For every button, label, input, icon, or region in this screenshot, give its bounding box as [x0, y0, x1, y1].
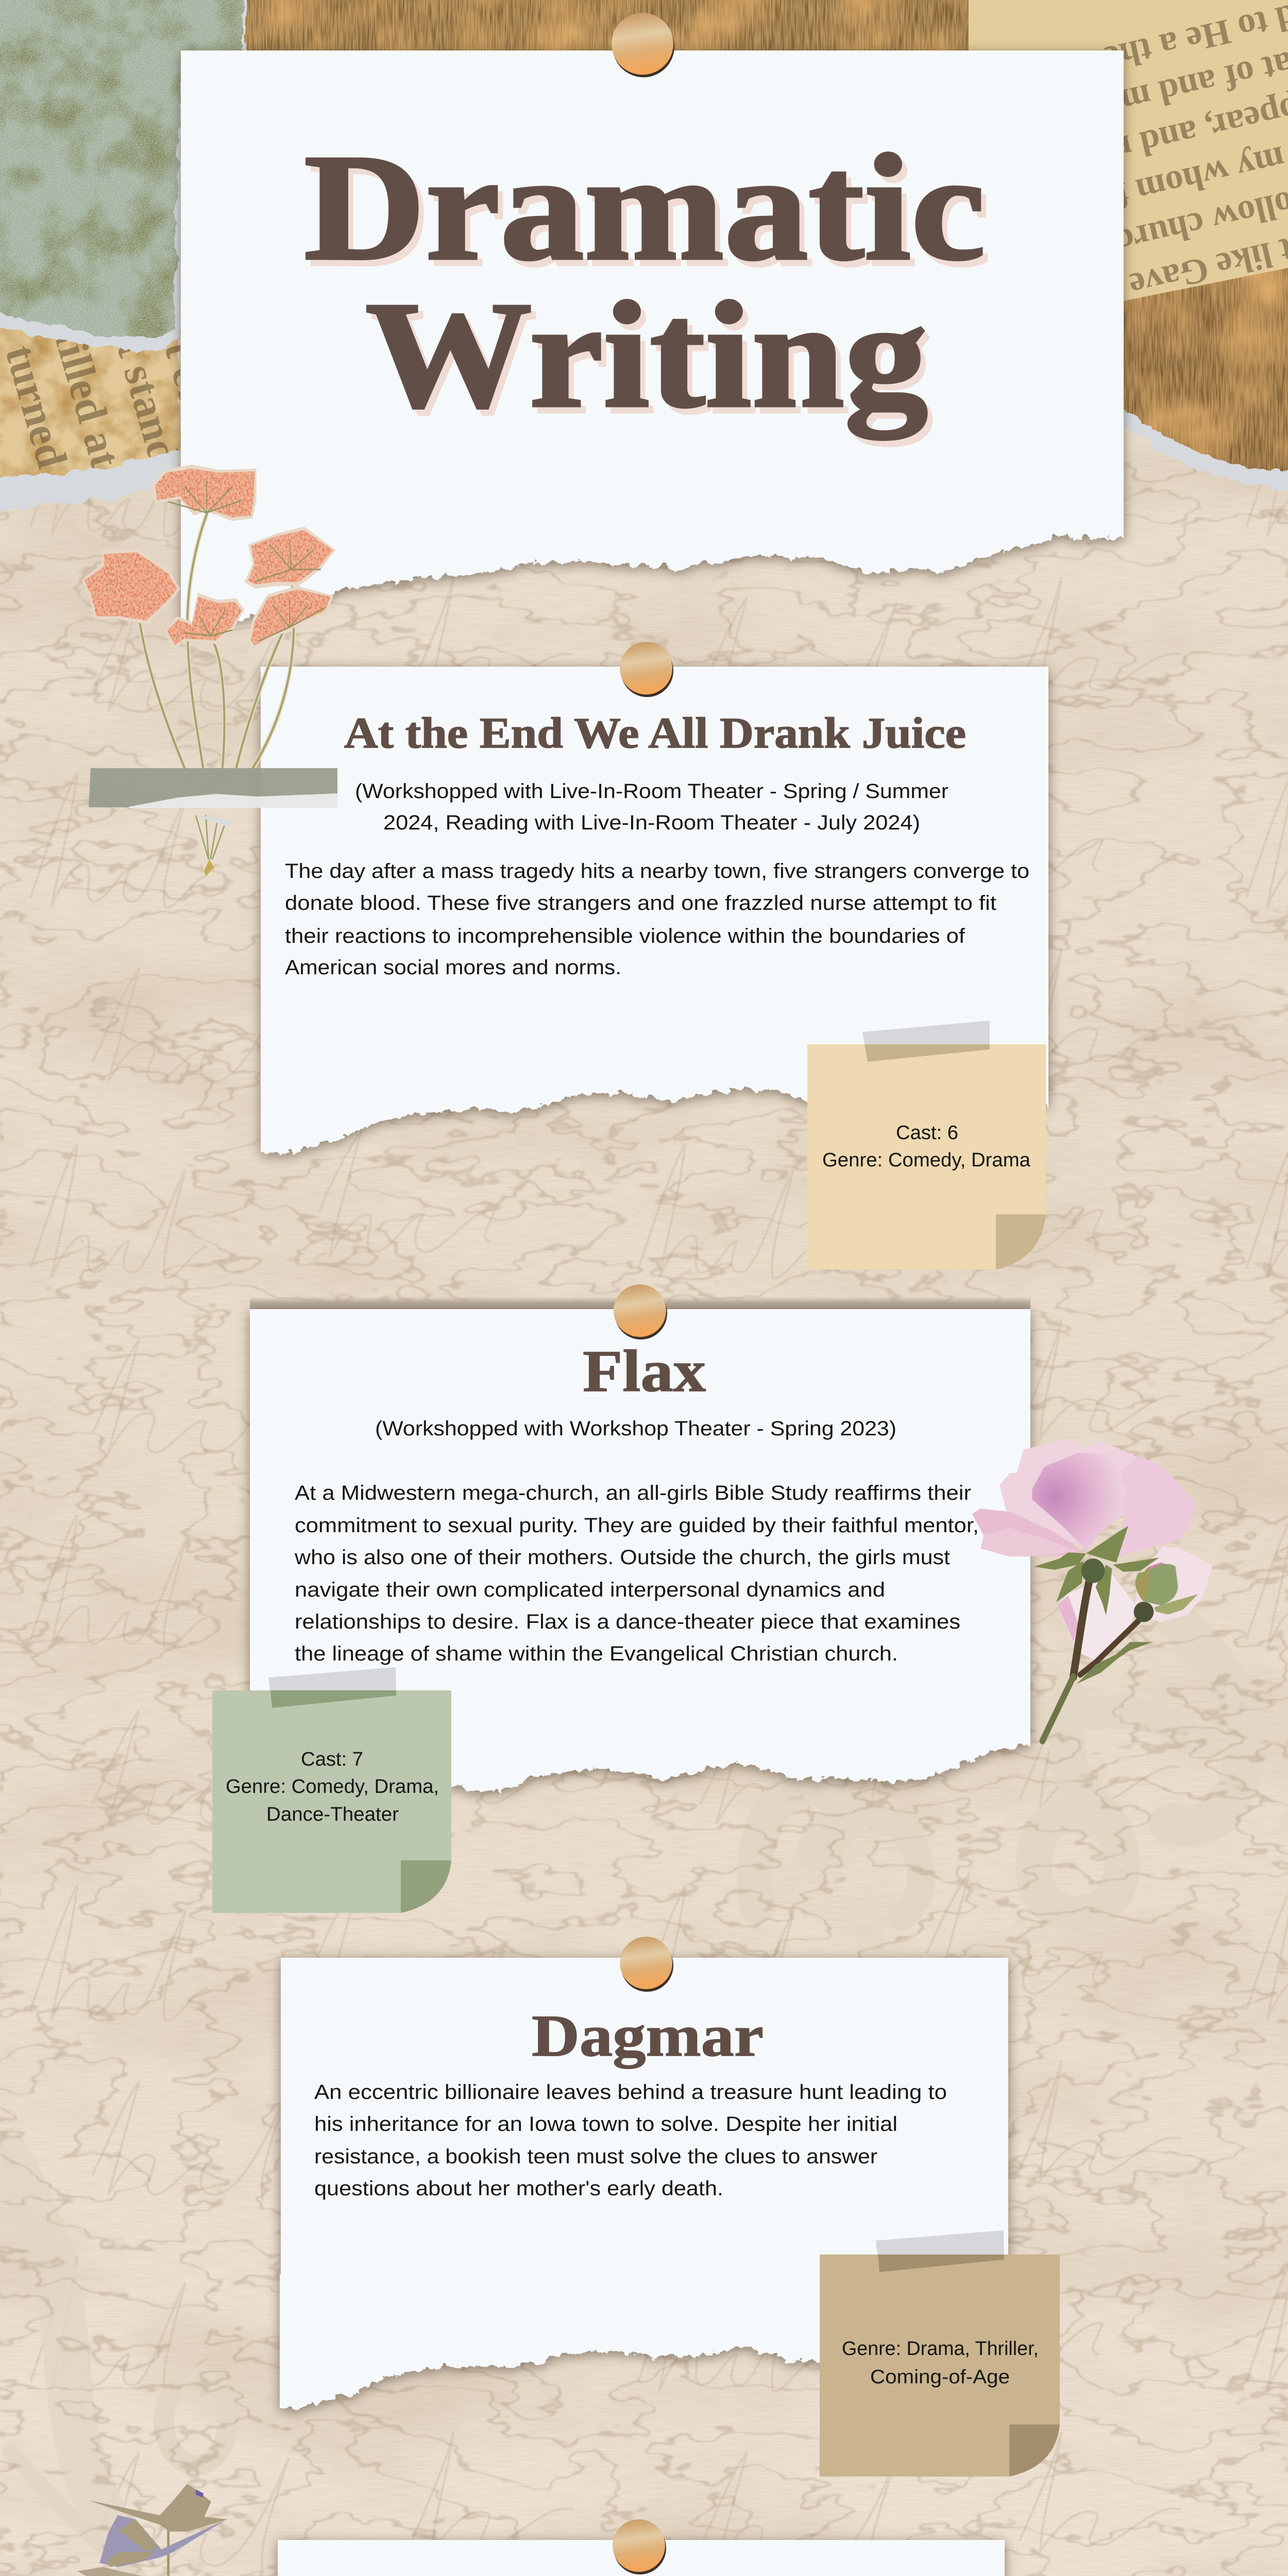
pin	[612, 13, 674, 77]
title: Dramatic	[309, 129, 991, 298]
back petals	[999, 1438, 1147, 1546]
torn newspaper left: filled at	[45, 325, 129, 473]
tape	[862, 1021, 990, 1062]
production history: (Workshopped with Workshop Theater - Spring 2023)	[375, 1417, 896, 1440]
torn paper sheet	[270, 1958, 1020, 2408]
stems	[1042, 1583, 1139, 1741]
torn paper sheet	[268, 2540, 1015, 2576]
synopsis: At a Midwestern mega-church, an all-girls Bible Study reaffirms their	[295, 1482, 971, 1504]
torn green paper top left	[0, 0, 242, 348]
pin	[613, 2519, 666, 2574]
note text: Genre: Drama, Thriller,	[842, 2338, 1039, 2360]
note text: Genre: Comedy, Drama,	[226, 1776, 439, 1798]
torn paper sheet	[247, 667, 1056, 1157]
production history	[355, 780, 948, 834]
panel: Flax	[242, 1284, 1038, 1803]
bloom E	[248, 586, 334, 650]
panel: title sheet	[170, 13, 1133, 626]
torn newspaper left: st et	[150, 319, 217, 405]
bud hip	[1134, 1602, 1154, 1622]
panel: Backwash	[230, 2519, 1015, 2576]
washi tape over stems	[89, 768, 337, 827]
pin	[620, 642, 673, 697]
left petals	[972, 1509, 1083, 1556]
tape over note	[270, 1690, 396, 1708]
synopsis: American social mores and norms.	[285, 956, 621, 979]
sticky note: cast 7	[212, 1667, 451, 1913]
torn paper sheet	[242, 1309, 1038, 1803]
lower petals	[1133, 1546, 1212, 1622]
synopsis: the lineage of shame within the Evangelical Christian church.	[295, 1642, 898, 1665]
title	[304, 123, 991, 448]
synopsis: questions about her mother's early death.	[314, 2177, 723, 2200]
central petal	[1032, 1453, 1126, 1551]
synopsis: An eccentric billionaire leaves behind a treasure hunt leading to	[314, 2081, 947, 2104]
calyx sepals	[1034, 1526, 1159, 1616]
tape	[876, 2230, 1004, 2272]
tape over note	[878, 2255, 1004, 2272]
heading: Dagmar	[532, 2003, 764, 2069]
title: Dramatic	[304, 123, 986, 292]
synopsis	[314, 2081, 947, 2200]
synopsis: navigate their own complicated interpersonal dynamics and	[295, 1579, 885, 1601]
synopsis: relationships to desire. Flax is a dance-theater piece that examines	[295, 1611, 960, 1633]
tape over note	[865, 1044, 990, 1062]
bloom B	[82, 549, 180, 624]
folded corner	[1009, 2425, 1060, 2477]
note text: Genre: Comedy, Drama	[822, 1149, 1031, 1171]
lower stem fan	[193, 815, 231, 876]
sticky note: genre	[820, 2230, 1060, 2477]
torn paper sheet	[170, 50, 1133, 626]
note text	[226, 1749, 439, 1825]
folded corner	[401, 1860, 451, 1913]
note text	[822, 1122, 1031, 1171]
synopsis: The day after a mass tragedy hits a nearby town, five strangers converge to	[285, 860, 1029, 883]
illustration: pressed violet larkspur	[77, 2484, 277, 2576]
synopsis	[294, 1482, 979, 1665]
panel: At the End We All Drank Juice	[247, 642, 1056, 1157]
bloom A	[151, 464, 257, 521]
tape	[268, 1667, 396, 1708]
synopsis	[285, 860, 1029, 979]
torn newspaper left: at stand	[101, 314, 188, 469]
bud	[1136, 1564, 1178, 1605]
synopsis: their reactions to incomprehensible violence within the boundaries of	[285, 925, 965, 947]
illustration: pressed peach wildflowers	[82, 464, 335, 876]
bloom C	[245, 527, 335, 589]
heading: At the End We All Drank Juice	[344, 709, 966, 757]
synopsis: donate blood. These five strangers and one frazzled nurse attempt to fit	[285, 892, 996, 914]
note paper	[212, 1690, 451, 1913]
rose hip	[1081, 1558, 1105, 1583]
bloom D	[164, 593, 245, 650]
production history: 2024, Reading with Live-In-Room Theater - July 2024)	[383, 811, 920, 834]
note text: Cast: 6	[896, 1122, 958, 1144]
heading: Flax	[583, 1338, 706, 1404]
synopsis: his inheritance for an Iowa town to solve. Despite her initial	[314, 2113, 897, 2136]
leaf	[1077, 1642, 1153, 1684]
production history: (Workshopped with Live-In-Room Theater - Spring / Summer	[355, 780, 948, 803]
synopsis: commitment to sexual purity. They are guided by their faithful mentor,	[295, 1514, 979, 1537]
folded corner	[996, 1214, 1046, 1269]
synopsis: who is also one of their mothers. Outside the church, the girls must	[294, 1546, 950, 1569]
torn brown paper top	[227, 0, 979, 88]
note text	[842, 2338, 1039, 2388]
pin	[614, 1284, 667, 1340]
note text: Cast: 7	[301, 1749, 363, 1770]
title: Writing	[365, 270, 928, 442]
torn brown paper right	[958, 155, 1288, 489]
blossom 2	[99, 2515, 227, 2567]
note text: Dance-Theater	[266, 1804, 399, 1825]
note paper	[820, 2255, 1060, 2477]
synopsis: resistance, a bookish teen must solve the clues to answer	[314, 2145, 877, 2168]
right petal	[1118, 1455, 1197, 1556]
pin	[620, 1937, 673, 1992]
panel: Dagmar	[270, 1937, 1060, 2477]
blossom 1	[89, 2484, 228, 2532]
top shadow strip	[250, 1297, 1030, 1310]
illustration: pressed pink rose	[972, 1438, 1212, 1741]
note paper	[807, 1044, 1046, 1269]
torn newspaper top right	[969, 0, 1288, 301]
sticky note: cast 6	[807, 1021, 1046, 1269]
title: Writing	[370, 277, 933, 448]
torn newspaper left	[0, 258, 217, 514]
note text: Coming-of-Age	[870, 2366, 1010, 2388]
collage: torn papers at top	[0, 0, 1288, 514]
